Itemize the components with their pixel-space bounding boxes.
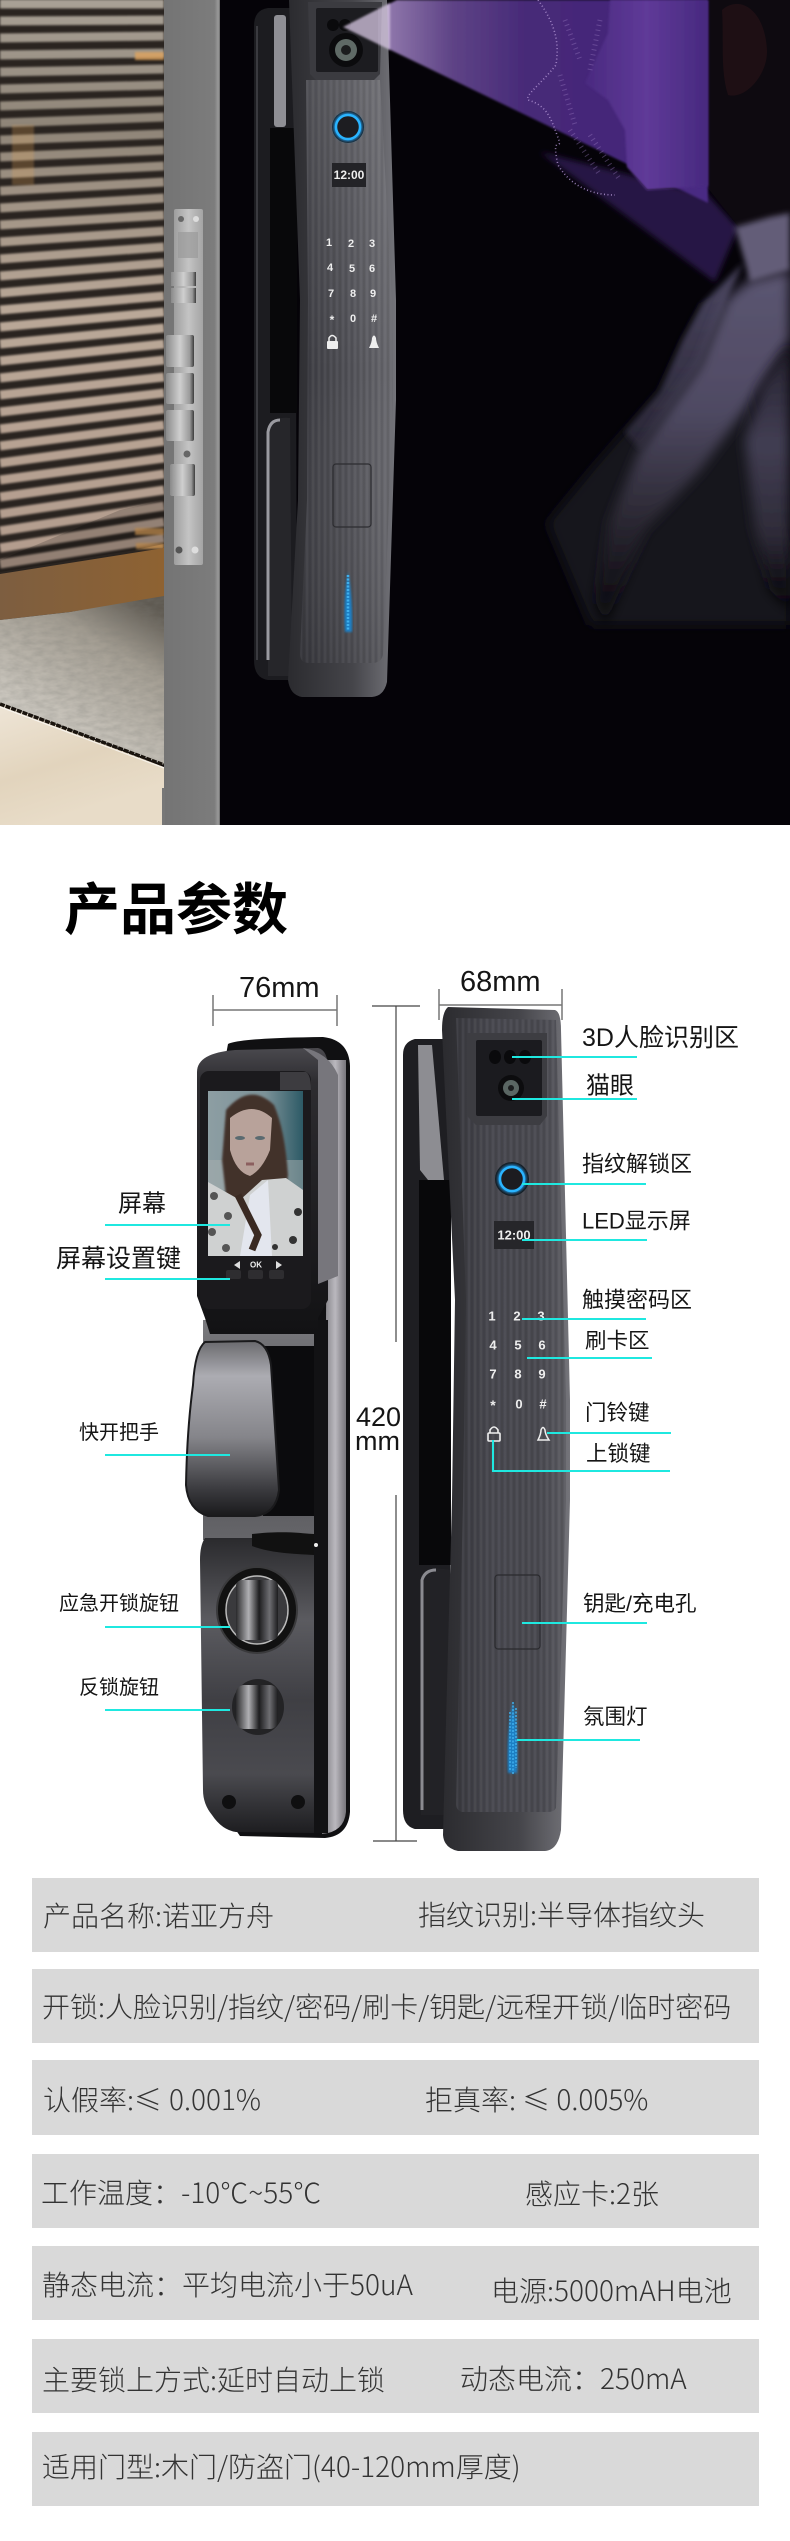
quick-open handle [186, 1341, 279, 1516]
person head and neck [585, 0, 790, 226]
collar [735, 213, 790, 282]
touch keypad: 1 [326, 237, 332, 249]
main body [442, 1007, 570, 1851]
spec row 6 [32, 2339, 759, 2413]
callout: card area [527, 1329, 652, 1358]
deadlock knob [232, 1679, 284, 1735]
fingerprint sensor [495, 1162, 529, 1196]
spec row 5 [32, 2246, 759, 2320]
spec row 1: 指纹识别:半导体指纹头 [418, 1894, 705, 1934]
touch keypad: 1 [488, 1308, 496, 1324]
callout: peephole [512, 1072, 637, 1100]
sweater [547, 213, 790, 625]
screws [222, 1795, 305, 1809]
callout: screen: 屏幕 [118, 1190, 166, 1218]
callout: screen [105, 1190, 230, 1225]
ambient light [344, 572, 352, 632]
callout: ambient light: 氛围灯 [583, 1705, 648, 1729]
right rail [322, 1060, 346, 1834]
touch keypad: * [490, 1397, 496, 1413]
camera module [467, 1033, 547, 1125]
callout: ambient light [517, 1705, 648, 1740]
door viewer photo [208, 1091, 303, 1256]
touch keypad: * [330, 313, 335, 327]
callout: deadlock knob: 反锁旋钮 [79, 1676, 159, 1699]
callout: emergency knob: 应急开锁旋钮 [59, 1592, 179, 1615]
back handle [403, 1039, 451, 1829]
time display: 12:00 [334, 168, 365, 182]
touch keypad: 4 [489, 1338, 497, 1352]
callout: doorbell key: 门铃键 [585, 1401, 650, 1425]
callout: 3D face area: 3D人脸识别区 [582, 1024, 739, 1052]
smart lock main body [288, 0, 396, 697]
brushed face panel [456, 1018, 566, 1812]
lit face [585, 0, 708, 190]
touch keypad: 0 [350, 313, 356, 325]
dim beam under chin [540, 152, 738, 282]
spec row 4: 感应卡:2张 [525, 2173, 659, 2213]
spec row 1 [32, 1878, 759, 1952]
left callouts [56, 1190, 230, 1710]
screen settings buttons [226, 1260, 284, 1279]
LED display [494, 1221, 534, 1249]
touch keypad: 4 [327, 262, 334, 274]
dark column beside plate [314, 1320, 328, 1833]
dimension 420mm: 420 [356, 1402, 401, 1432]
emergency unlock knob [217, 1567, 297, 1653]
spec row 5: 静态电流：平均电流小于50uA [42, 2264, 413, 2304]
callout: LED: LED显示屏 [582, 1208, 691, 1234]
touch keypad [326, 237, 379, 349]
touch keypad: 2 [348, 238, 354, 250]
dimension 420mm [355, 1006, 420, 1841]
section title: 产品参数 [64, 866, 288, 946]
screen head [197, 1048, 338, 1334]
touch keypad: # [539, 1396, 547, 1412]
spec row 3 [32, 2060, 759, 2135]
spec row 4: 工作温度：-10℃~55℃ [41, 2172, 321, 2212]
spec row 3: 认假率:≤0.001% [43, 2079, 261, 2119]
touch keypad: 7 [489, 1366, 497, 1382]
dimension 76mm: 76mm [239, 972, 320, 1004]
touch keypad: 5 [514, 1338, 522, 1352]
touch keypad: 3 [537, 1308, 545, 1324]
side view of lock [403, 1007, 570, 1851]
spec row 1: 产品名称:诺亚方舟 [43, 1895, 274, 1935]
touch keypad: 8 [514, 1366, 522, 1382]
dimension 68mm: 68mm [460, 966, 541, 998]
front view of lock [186, 1037, 350, 1838]
touch keypad: 8 [350, 288, 356, 300]
touch keypad: 2 [513, 1308, 521, 1324]
key slot cover [495, 1575, 540, 1649]
time display [332, 163, 366, 187]
callout: lock key: 上锁键 [586, 1442, 651, 1466]
spec row 3: 拒真率: ≤ 0.005% [425, 2079, 648, 2119]
touch keypad: 6 [369, 263, 375, 275]
spec row 7 [32, 2432, 759, 2506]
touch keypad: 6 [538, 1338, 546, 1352]
dotted face scan [528, 0, 615, 195]
callout: quick-open handle: 快开把手 [79, 1421, 159, 1444]
touch keypad: 5 [349, 263, 355, 275]
ambient light [508, 1702, 518, 1775]
touch keypad: 3 [369, 238, 375, 250]
door edge [162, 0, 220, 825]
callout: card area: 刷卡区 [585, 1329, 650, 1353]
LED display: 12:00 [497, 1228, 531, 1242]
spec row 5: 电源:5000mAH电池 [491, 2270, 732, 2310]
smart lock back handle [254, 8, 297, 680]
callout: lock key [493, 1440, 670, 1471]
dimension 76mm [213, 972, 337, 1026]
spec row 6: 动态电流：250mA [460, 2358, 687, 2398]
touch keypad: 7 [328, 288, 334, 300]
right callouts [493, 1024, 739, 1740]
screen settings buttons: OK [250, 1260, 262, 1270]
fingerprint sensor [332, 111, 364, 143]
spec row 4 [32, 2154, 759, 2228]
touch keypad: 0 [515, 1396, 523, 1412]
spec row 6: 主要锁上方式:延时自动上锁 [42, 2359, 385, 2399]
camera module [308, 2, 382, 80]
lower plate [200, 1538, 314, 1833]
callout: doorbell key [547, 1401, 671, 1433]
dimension 420mm: mm [355, 1426, 400, 1456]
callout: fingerprint: 指纹解锁区 [582, 1152, 692, 1176]
spec row 2 [32, 1969, 759, 2043]
purple scanning beam [343, 0, 708, 203]
outer black frame [215, 1037, 350, 1838]
callout: key and charging port: 钥匙/充电孔 [583, 1592, 696, 1616]
callout: peephole: 猫眼 [586, 1072, 634, 1100]
hero photo panel [0, 0, 790, 825]
spec row 2: 开锁:人脸识别/指纹/密码/刷卡/钥匙/远程开锁/临时密码 [42, 1986, 731, 2026]
neck [203, 1320, 315, 1540]
touch keypad: # [371, 313, 377, 325]
key slot cover [333, 464, 371, 527]
callout: touch keypad: 触摸密码区 [582, 1288, 692, 1312]
ear [722, 4, 767, 96]
callout: screen settings keys: 屏幕设置键 [56, 1245, 181, 1273]
touch keypad: 9 [538, 1366, 546, 1382]
spec row 7: 适用门型:木门/防盗门(40-120mm厚度) [42, 2446, 521, 2486]
dimension 68mm [439, 966, 562, 1020]
mortise lock strip [166, 209, 203, 565]
touch keypad: 9 [370, 288, 376, 300]
touch keypad [488, 1308, 549, 1441]
room scene with window blinds [0, 0, 164, 825]
